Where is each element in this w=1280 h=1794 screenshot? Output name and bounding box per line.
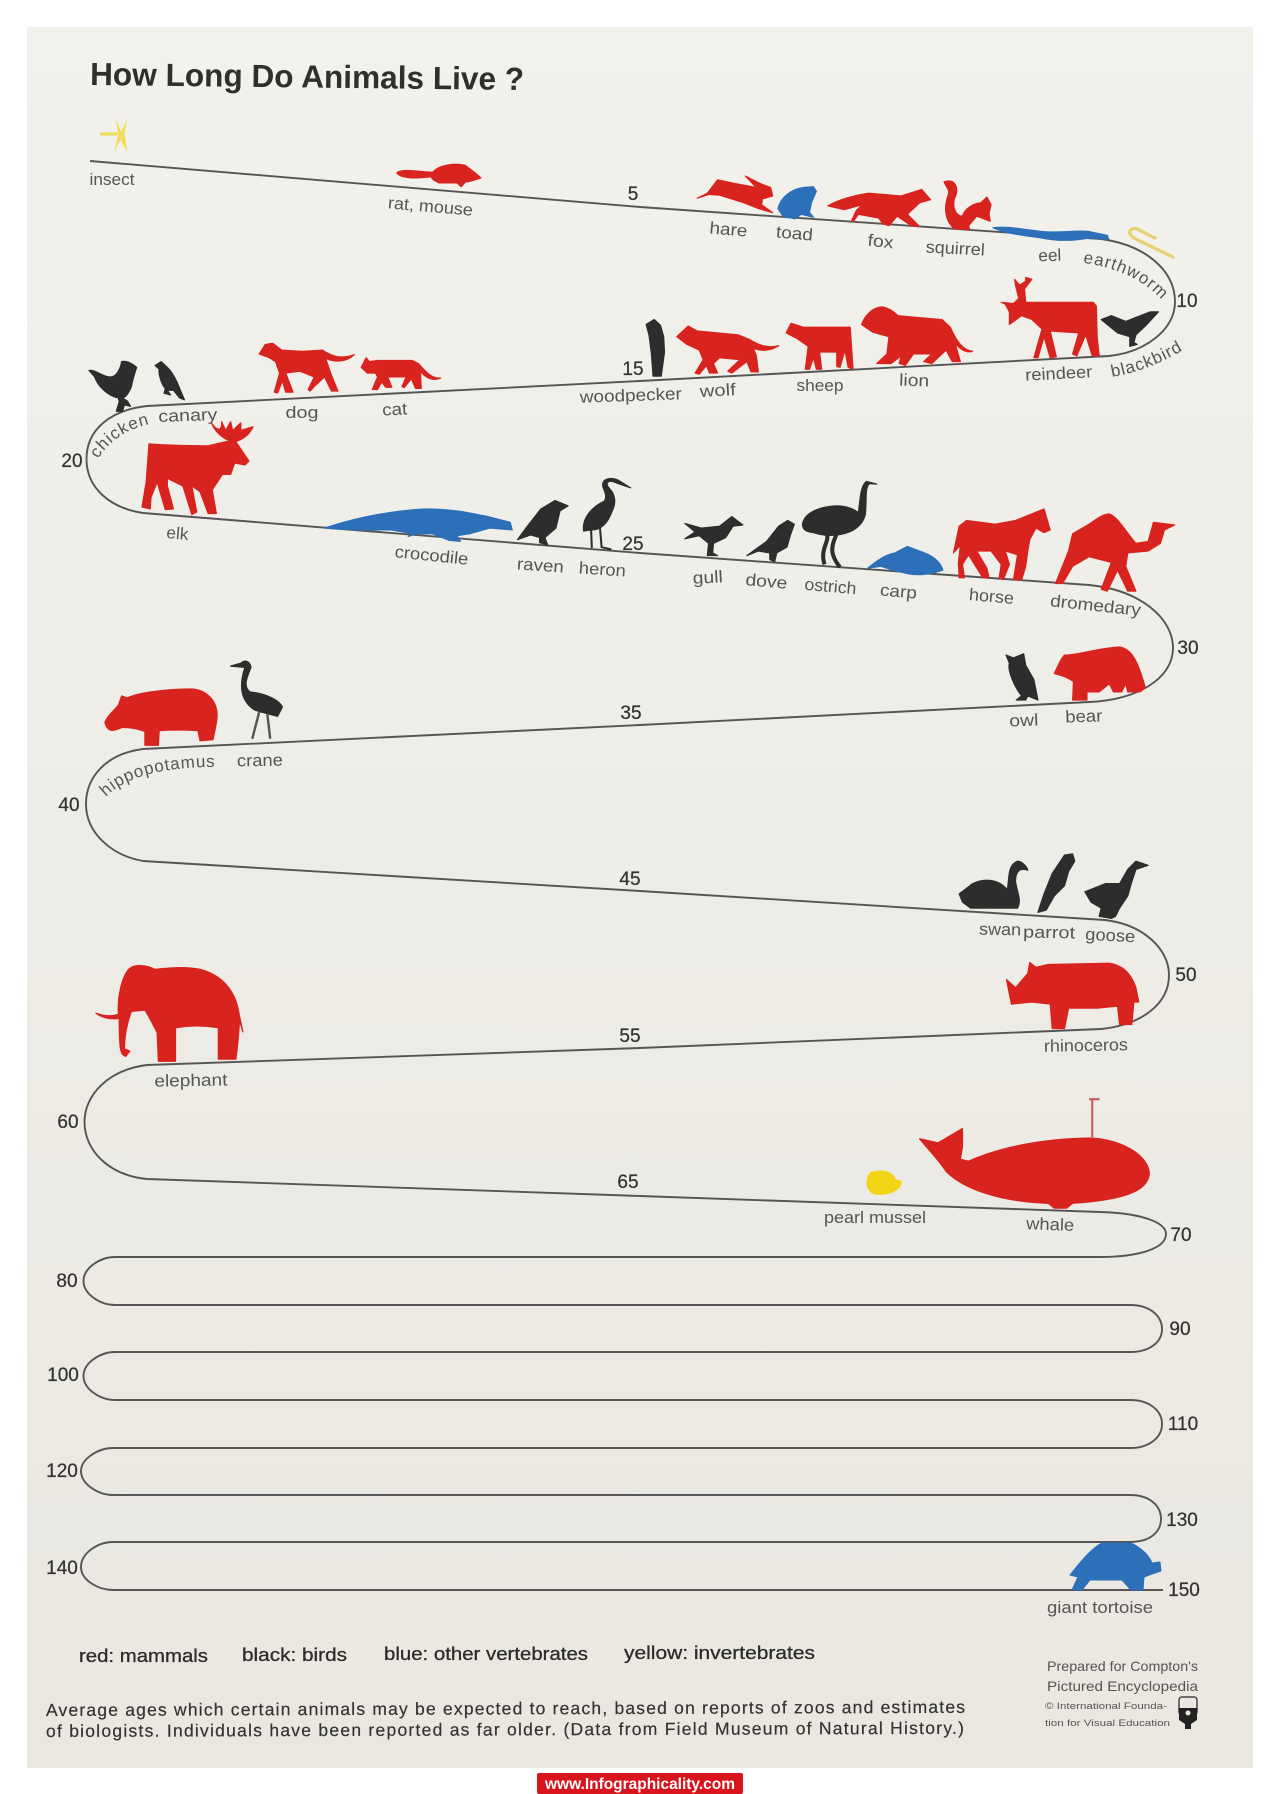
age scale numbers: 130 xyxy=(1166,1510,1198,1531)
credit: Prepared for Compton's xyxy=(1047,1658,1198,1674)
animal: insect: insect xyxy=(90,170,135,189)
title: How Long Do Animals Live ? xyxy=(90,56,524,97)
age scale numbers: 65 xyxy=(617,1172,639,1193)
animal: toad xyxy=(775,187,816,245)
animal: elk xyxy=(142,422,253,544)
animal: reindeer: reindeer xyxy=(1025,362,1093,385)
animal: whale xyxy=(920,1099,1149,1235)
animal: woodpecker: woodpecker xyxy=(578,384,682,407)
animal: wolf: wolf xyxy=(698,380,737,401)
animal: swan xyxy=(959,861,1028,939)
age scale numbers: 90 xyxy=(1169,1319,1191,1340)
animal: squirrel xyxy=(925,181,991,260)
age scale numbers xyxy=(46,184,1200,1601)
age scale numbers: 55 xyxy=(619,1026,641,1047)
animal: rat, mouse xyxy=(387,164,481,220)
animal: squirrel: squirrel xyxy=(925,237,985,260)
animal: fox xyxy=(828,189,931,252)
animal: lion: lion xyxy=(899,370,930,391)
animal: chicken: chicken xyxy=(92,416,148,457)
animal: fox: fox xyxy=(867,231,895,252)
animal: sheep xyxy=(786,323,853,395)
age scale numbers: 140 xyxy=(46,1558,78,1579)
animal: canary: canary xyxy=(158,405,218,426)
animal: ostrich xyxy=(802,481,877,598)
animal: earthworm xyxy=(1084,226,1175,299)
age scale numbers: 60 xyxy=(57,1112,79,1133)
credit: tion for Visual Education xyxy=(1045,1718,1170,1728)
animal: dove xyxy=(745,520,794,593)
animal: hare xyxy=(697,176,773,241)
animal: crocodile: crocodile xyxy=(394,542,469,569)
animal: gull: gull xyxy=(692,567,723,588)
animal: crocodile xyxy=(324,509,512,569)
age scale numbers: 150 xyxy=(1168,1580,1200,1601)
legend: red: mammals xyxy=(79,1645,208,1666)
animal: hare: hare xyxy=(709,218,748,241)
animal: cat: cat xyxy=(382,399,408,420)
legend: black: birds xyxy=(242,1644,347,1665)
animal: parrot: parrot xyxy=(1023,923,1076,942)
animal: blackbird: blackbird xyxy=(1110,340,1182,377)
animal: insect xyxy=(90,119,135,189)
age scale numbers: 30 xyxy=(1177,638,1199,659)
animal: bear xyxy=(1054,647,1145,727)
credit: Pictured Encyclopedia xyxy=(1047,1678,1198,1694)
animal: pearl mussel: pearl mussel xyxy=(824,1208,926,1227)
animal: sheep: sheep xyxy=(796,376,844,395)
animal: dromedary: dromedary xyxy=(1049,591,1142,620)
credit: © International Founda- xyxy=(1045,1701,1167,1711)
animal: hippopotamus: hippopotamus xyxy=(98,758,214,796)
animal: owl xyxy=(1006,654,1039,731)
icon: lantern logo xyxy=(1179,1697,1197,1729)
age scale numbers: 15 xyxy=(622,359,644,380)
animal: woodpecker xyxy=(578,320,682,407)
animal: gull xyxy=(685,517,743,588)
animal: rhinoceros: rhinoceros xyxy=(1044,1035,1128,1056)
age scale numbers: 120 xyxy=(46,1461,78,1482)
animal: hippopotamus xyxy=(98,688,218,796)
animal: elk: elk xyxy=(166,523,190,544)
animal: toad: toad xyxy=(775,222,814,245)
animal: chicken xyxy=(88,360,148,457)
age scale numbers: 110 xyxy=(1168,1414,1198,1435)
age scale numbers: 80 xyxy=(56,1271,78,1292)
animal: earthworm: earthworm xyxy=(1084,254,1166,299)
animal: heron: heron xyxy=(578,558,626,581)
animal: horse xyxy=(953,509,1050,608)
animal: pearl mussel xyxy=(824,1171,926,1227)
serpentine lifespan line xyxy=(81,161,1175,1590)
footnote: of biologists. Individuals have been reported as far older. (Data from Field Museum of Natural History.) xyxy=(46,1718,964,1741)
animal: reindeer xyxy=(1001,277,1099,385)
age scale numbers: 5 xyxy=(628,184,638,205)
animal: swan: swan xyxy=(979,920,1021,939)
footnote xyxy=(46,1697,965,1741)
age scale numbers: 10 xyxy=(1176,291,1198,312)
legend xyxy=(79,1642,815,1666)
animal: wolf xyxy=(677,326,779,401)
animal: crane: crane xyxy=(237,751,283,770)
animal: owl: owl xyxy=(1009,711,1039,731)
animal: dog xyxy=(259,343,354,422)
age scale numbers: 40 xyxy=(58,795,80,816)
legend: yellow: invertebrates xyxy=(624,1642,815,1663)
animal: rhinoceros xyxy=(1007,962,1139,1056)
animal: raven xyxy=(516,501,568,577)
animal: ostrich: ostrich xyxy=(804,575,857,598)
animal: horse: horse xyxy=(968,585,1015,608)
animal: whale: whale xyxy=(1025,1214,1075,1235)
age scale numbers: 35 xyxy=(620,703,642,724)
animal: eel xyxy=(993,227,1109,265)
footnote: Average ages which certain animals may be expected to reach, based on reports of zoos and estimates xyxy=(46,1697,965,1720)
animal: elephant: elephant xyxy=(154,1070,228,1091)
animal: giant tortoise xyxy=(1047,1543,1161,1617)
animal: heron xyxy=(578,479,631,581)
age scale numbers: 50 xyxy=(1175,965,1197,986)
animal: rat, mouse: rat, mouse xyxy=(387,193,474,220)
animal: eel: eel xyxy=(1038,246,1062,265)
animal: dove: dove xyxy=(745,570,788,593)
animal: parrot xyxy=(1023,854,1076,942)
animal: carp xyxy=(868,546,943,603)
animal: carp: carp xyxy=(879,580,918,603)
animal: dog: dog xyxy=(286,403,318,422)
source badge: www.Infographicality.com xyxy=(544,1776,735,1793)
age scale numbers: 70 xyxy=(1170,1225,1192,1246)
legend: blue: other vertebrates xyxy=(384,1643,588,1664)
animal: canary xyxy=(155,362,218,426)
credit xyxy=(1045,1658,1198,1728)
animal: blackbird xyxy=(1100,311,1182,377)
animal: crane xyxy=(231,661,283,770)
animal: raven: raven xyxy=(516,554,564,577)
animal: lion xyxy=(862,307,973,391)
animal: giant tortoise: giant tortoise xyxy=(1047,1598,1153,1617)
animal: goose: goose xyxy=(1085,925,1136,946)
animal: dromedary xyxy=(1049,514,1175,620)
age scale numbers: 20 xyxy=(61,451,83,472)
animal: elephant xyxy=(96,966,243,1091)
age scale numbers: 45 xyxy=(619,869,641,890)
animal: cat xyxy=(361,358,441,420)
animal: goose xyxy=(1085,861,1148,946)
age scale numbers: 100 xyxy=(47,1365,79,1386)
age scale numbers: 25 xyxy=(622,534,644,555)
animal: bear: bear xyxy=(1065,706,1103,727)
